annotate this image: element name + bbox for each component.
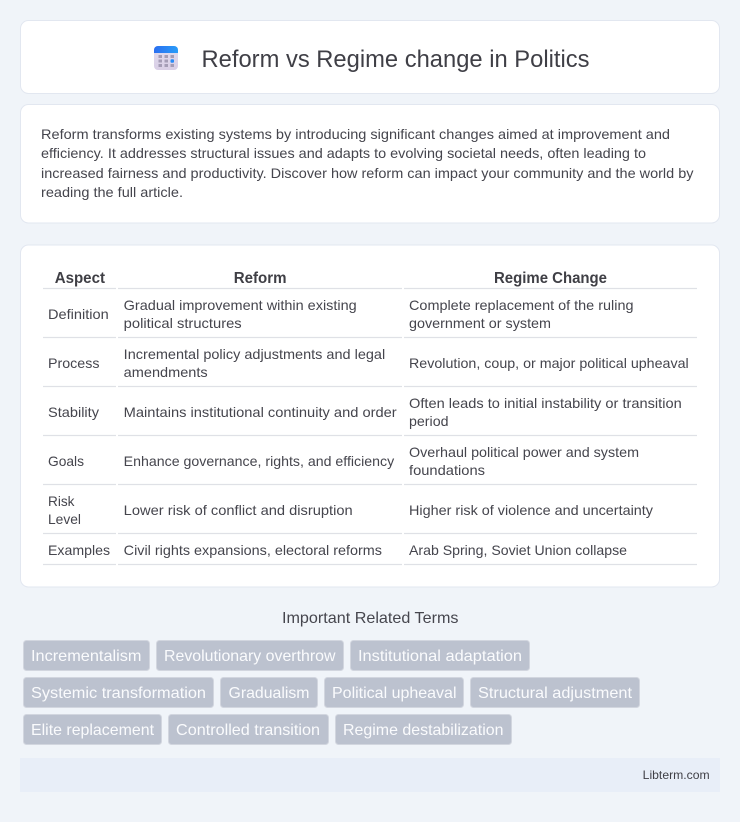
table header row: Aspect bbox=[55, 270, 106, 287]
row: process: Incremental policy adjustments and legal bbox=[124, 346, 385, 362]
tag: Institutional adaptation: Institutional adaptation bbox=[358, 648, 522, 665]
row: examples: Arab Spring, Soviet Union collapse bbox=[409, 542, 627, 558]
row: definition: Complete replacement of the ruling bbox=[409, 297, 634, 313]
row: stability: period bbox=[409, 413, 448, 429]
tag: Systemic transformation: Systemic transformation bbox=[31, 685, 206, 702]
tag: Controlled transition bbox=[168, 714, 328, 744]
table header row bbox=[55, 270, 607, 287]
row: stability: Maintains institutional continuity and order bbox=[124, 404, 397, 420]
row: goals: foundations bbox=[409, 462, 485, 478]
tag: Revolutionary overthrow bbox=[156, 640, 344, 670]
row: examples bbox=[48, 542, 627, 558]
panel: title header bbox=[20, 20, 720, 94]
row: goals: Enhance governance, rights, and efficiency bbox=[124, 453, 394, 469]
heading: related terms: Important Related Terms bbox=[282, 610, 458, 627]
tag: Political upheaval: Political upheaval bbox=[332, 685, 456, 702]
intro text block: efficiency. It addresses structural issues and adapts to evolving societal needs, often leading to bbox=[41, 145, 646, 161]
tag: Regime destabilization: Regime destabilization bbox=[343, 722, 504, 739]
row: stability: Often leads to initial instability or transition bbox=[409, 395, 682, 411]
intro text block: Reform transforms existing systems by introducing significant changes aimed at improvement and bbox=[41, 126, 670, 142]
row: process: Revolution, coup, or major political upheaval bbox=[409, 355, 689, 371]
table header row: Reform bbox=[234, 270, 286, 287]
row: definition: Gradual improvement within existing bbox=[124, 297, 357, 313]
tag: Gradualism: Gradualism bbox=[228, 685, 310, 702]
tag: Regime destabilization bbox=[336, 714, 512, 744]
row: stability: Stability bbox=[48, 404, 99, 420]
tag: Elite replacement bbox=[24, 714, 162, 744]
row: risk level: Level bbox=[48, 511, 81, 527]
tag: Gradualism bbox=[220, 678, 318, 708]
row: risk level: Higher risk of violence and uncertainty bbox=[409, 502, 653, 518]
tag: Incrementalism bbox=[24, 640, 150, 670]
intro text block: reading the full article. bbox=[41, 184, 183, 200]
row: risk level: Risk bbox=[48, 493, 75, 509]
row: goals: Overhaul political power and system bbox=[409, 444, 639, 460]
tag: Political upheaval bbox=[324, 678, 464, 708]
row: risk level bbox=[48, 493, 653, 527]
title: Reform vs Regime change in Politics bbox=[202, 46, 590, 73]
intro text block: increased fairness and productivity. Discover how reform can impact your community and the world by bbox=[41, 165, 694, 181]
icon: calendar bbox=[154, 46, 178, 70]
row: definition bbox=[48, 297, 634, 331]
row: process: amendments bbox=[124, 364, 208, 380]
footer: Libterm.com bbox=[643, 768, 710, 782]
tag: Incrementalism: Incrementalism bbox=[31, 648, 142, 665]
row: examples: Examples bbox=[48, 542, 110, 558]
tag: Structural adjustment: Structural adjustment bbox=[478, 685, 633, 702]
tag: Institutional adaptation bbox=[350, 640, 530, 670]
row: process: Process bbox=[48, 355, 100, 371]
tag: Elite replacement: Elite replacement bbox=[31, 722, 155, 739]
intro text block bbox=[41, 126, 694, 200]
row: examples: Civil rights expansions, electoral reforms bbox=[124, 542, 382, 558]
row: stability bbox=[48, 395, 682, 429]
footer bbox=[20, 758, 720, 792]
row: definition: Definition bbox=[48, 306, 109, 322]
tags: related terms bbox=[24, 640, 640, 744]
row: definition: government or system bbox=[409, 315, 551, 331]
row: definition: political structures bbox=[124, 315, 242, 331]
row: risk level: Lower risk of conflict and disruption bbox=[124, 502, 353, 518]
row: goals bbox=[48, 444, 639, 478]
tag: Structural adjustment bbox=[470, 678, 640, 708]
panel: introduction bbox=[20, 104, 720, 223]
row: process bbox=[48, 346, 689, 380]
table header row: Regime Change bbox=[494, 270, 607, 287]
tag: Systemic transformation bbox=[24, 678, 214, 708]
tag: Controlled transition: Controlled transition bbox=[176, 722, 320, 739]
tag: Revolutionary overthrow: Revolutionary overthrow bbox=[164, 648, 336, 665]
row: goals: Goals bbox=[48, 453, 84, 469]
panel: comparison table bbox=[20, 245, 720, 587]
